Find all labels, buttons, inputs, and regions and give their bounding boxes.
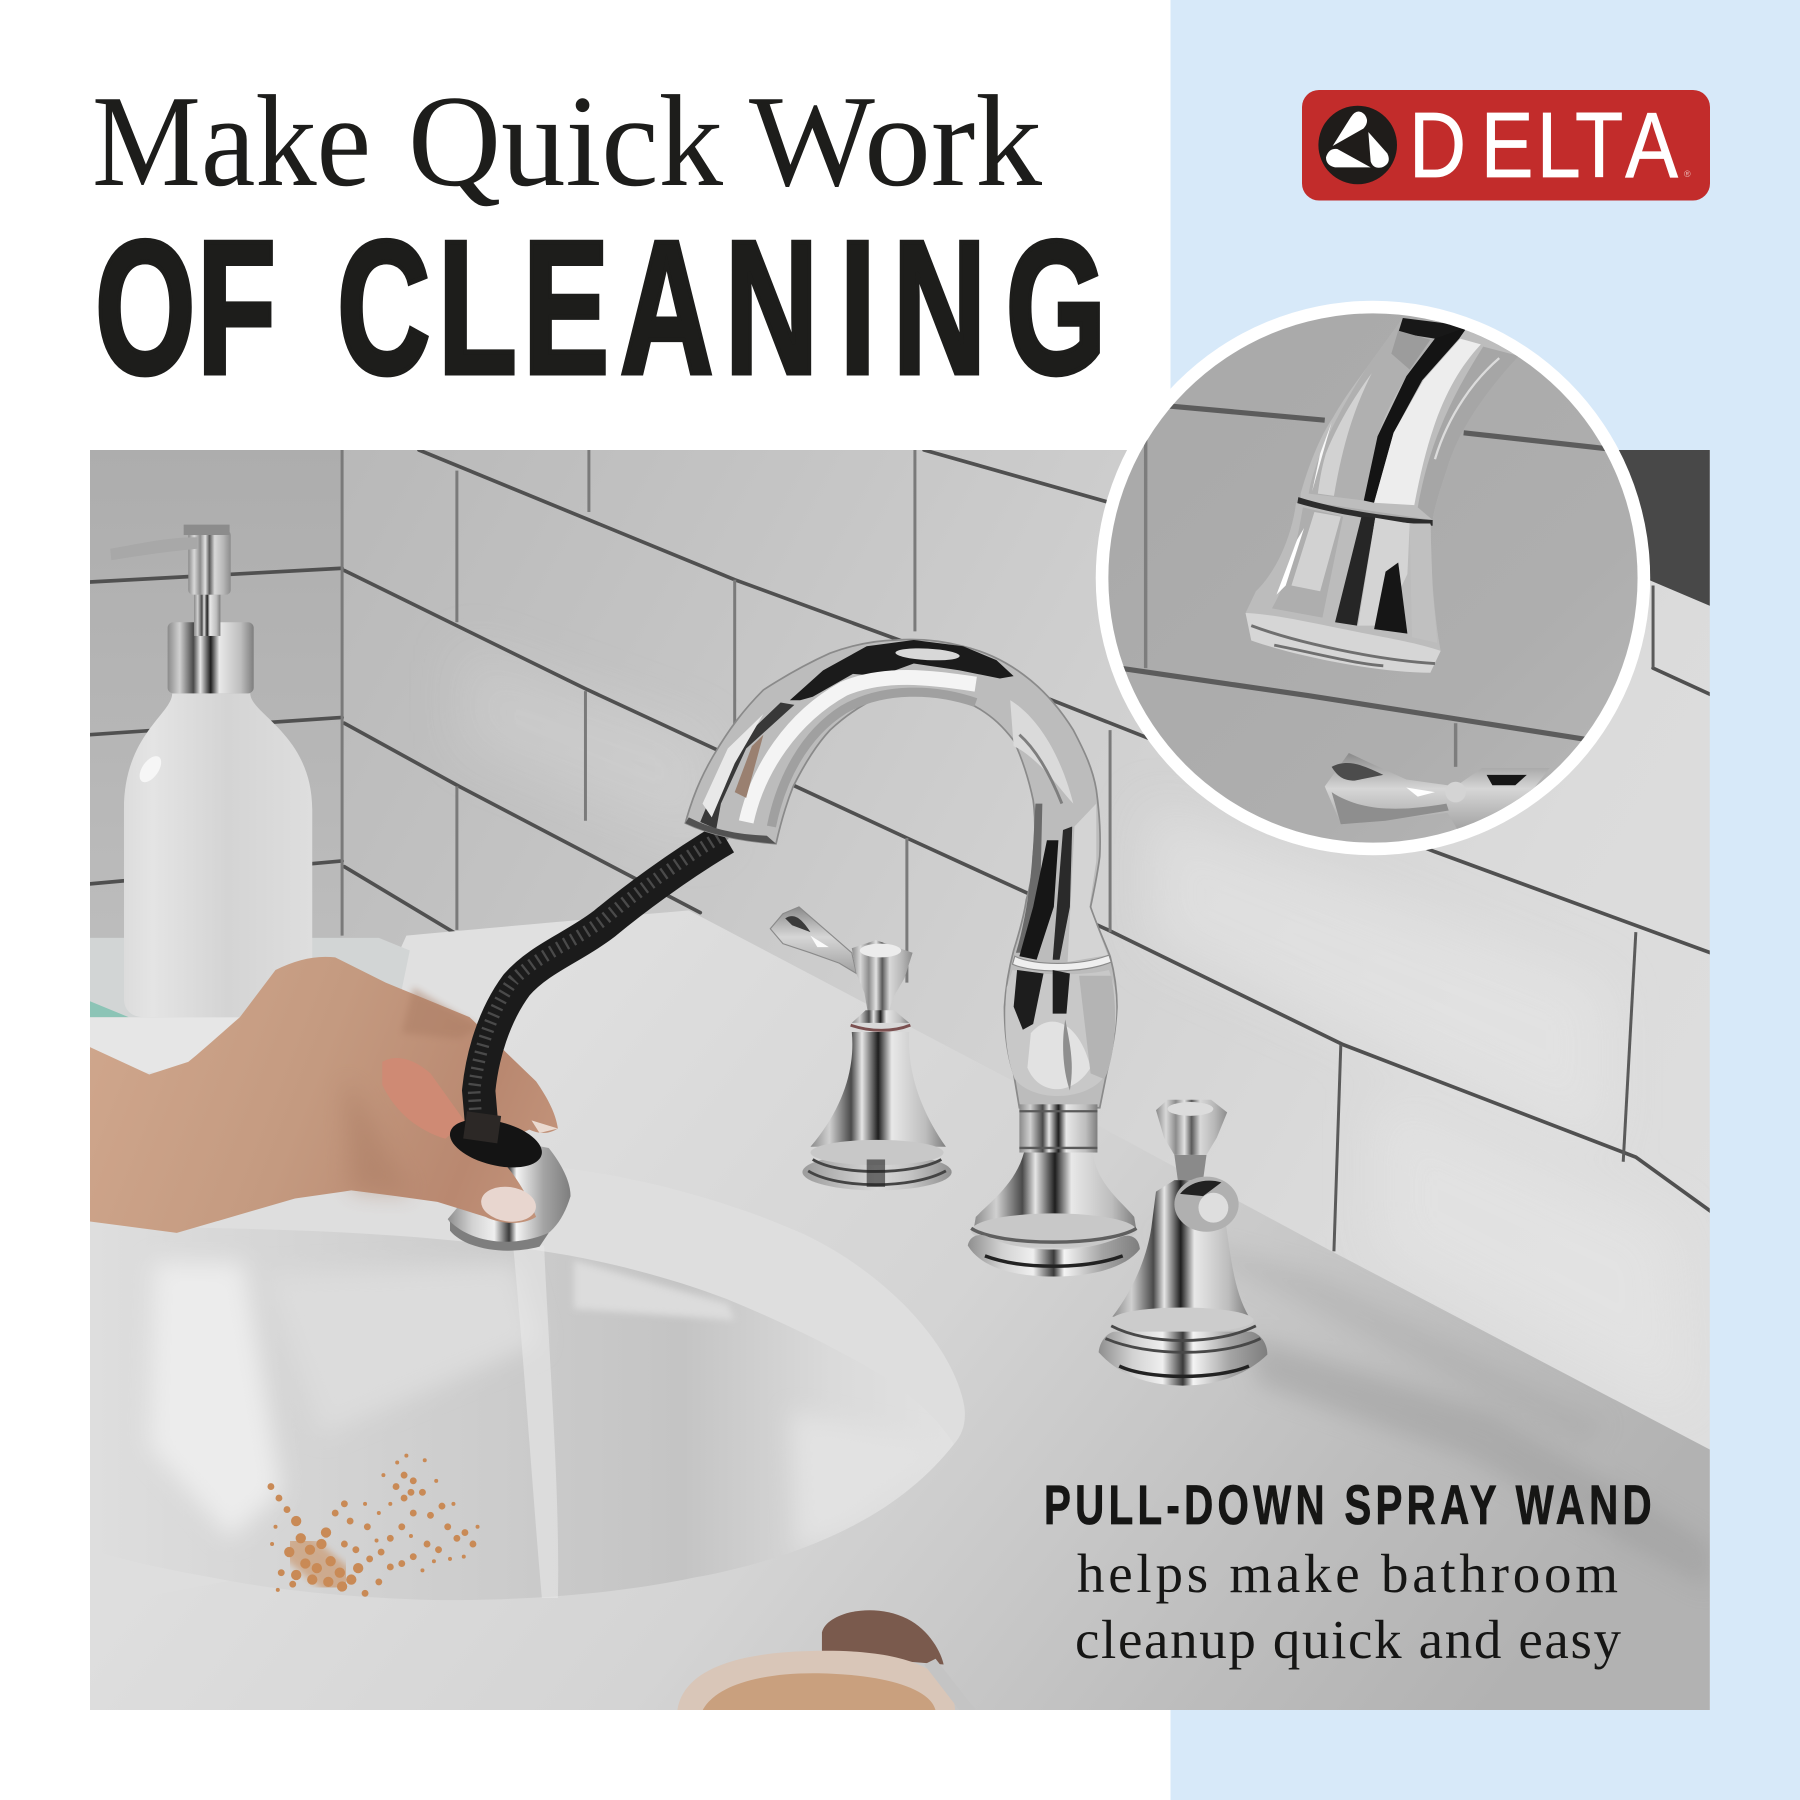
title: Make bbox=[92, 69, 371, 214]
detail spray head bbox=[1246, 503, 1441, 664]
title bbox=[92, 69, 1106, 414]
panel: bathroom sink photo bbox=[90, 301, 1710, 1710]
faucet base bbox=[968, 1104, 1140, 1277]
tray bbox=[90, 938, 410, 1072]
caption heading: PULL-DOWN SPRAY WAND bbox=[1044, 1475, 1652, 1537]
title: Work bbox=[749, 69, 1043, 214]
chrome spray head bbox=[448, 1142, 571, 1251]
makeup powder jar bbox=[677, 1651, 976, 1710]
caption line two: cleanup quick and easy bbox=[1075, 1609, 1622, 1670]
upper-right dark cabinet bbox=[1618, 450, 1710, 606]
soap dispenser bbox=[110, 525, 312, 1017]
hand bbox=[90, 957, 558, 1233]
circle tile grout bbox=[1119, 404, 1619, 767]
braided hose bbox=[474, 833, 726, 1131]
detail spray lip bbox=[1246, 613, 1441, 673]
logo: Delta: DELTA bbox=[1409, 94, 1678, 197]
water stream bbox=[513, 1246, 558, 1598]
title: OF CLEANING bbox=[95, 202, 1106, 414]
detail spout bbox=[1301, 318, 1519, 520]
counter shadows bbox=[1248, 1265, 1705, 1574]
panel: light blue column bbox=[1170, 0, 1800, 1800]
title: Quick bbox=[408, 69, 723, 214]
vertical grout lines bbox=[342, 450, 1653, 1251]
counter top bbox=[90, 910, 1710, 1710]
hose collar disk bbox=[450, 1112, 542, 1168]
detail lever handle bbox=[1325, 753, 1550, 832]
caption bbox=[1044, 1475, 1652, 1670]
right handle bbox=[1099, 1100, 1267, 1386]
soft glazed tile highlights bbox=[514, 709, 1358, 982]
makeup brush bbox=[822, 1610, 944, 1665]
faucet spout bbox=[685, 639, 1117, 1108]
left wall tiles bbox=[210, 450, 340, 644]
sink rim bbox=[805, 1265, 965, 1444]
rust powder spilled in sink bbox=[271, 1456, 478, 1593]
callout: circular spout detail bbox=[1096, 301, 1653, 855]
grout lines bbox=[90, 450, 1710, 1211]
logo: Delta: ® bbox=[1684, 169, 1691, 179]
left handle bbox=[770, 907, 952, 1190]
caption line one: helps make bathroom bbox=[1077, 1543, 1618, 1604]
sink basin bbox=[154, 1230, 954, 1600]
logo: Delta bbox=[1302, 90, 1710, 200]
